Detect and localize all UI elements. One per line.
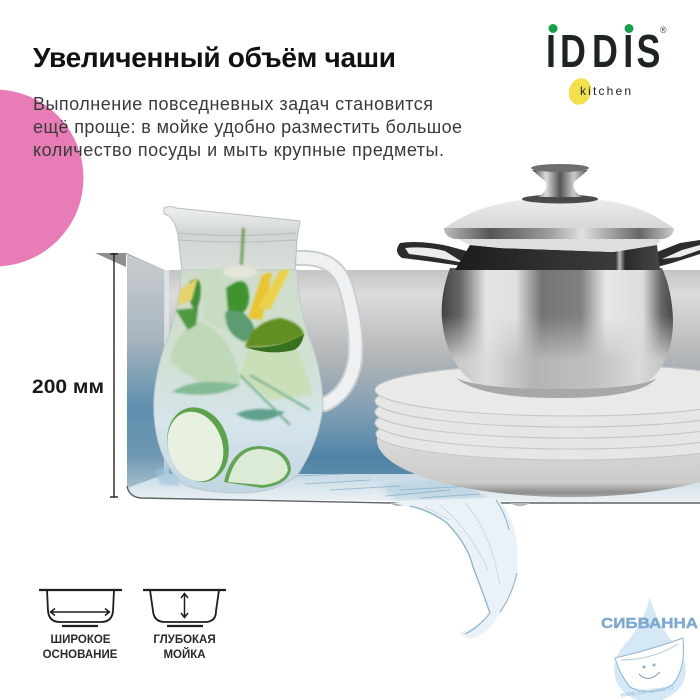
jug neck	[164, 206, 300, 272]
jug lemon wedges	[178, 270, 290, 320]
sink bottom edge	[127, 486, 700, 503]
pot lid rim	[444, 228, 674, 239]
steel pot	[397, 164, 700, 398]
pot lid dome	[445, 199, 673, 228]
icon: wide base sink	[39, 590, 122, 626]
description text	[33, 94, 462, 160]
watermark url: www.sibvanna.ru	[619, 685, 674, 699]
water stream	[393, 498, 518, 638]
icon: deep sink	[143, 590, 226, 626]
caption: wide base	[43, 634, 118, 661]
dimension line	[110, 253, 118, 497]
jug rim line	[178, 233, 296, 242]
pink circle	[0, 90, 84, 266]
bottom bowl plate	[377, 383, 700, 497]
caption: deep sink	[153, 634, 216, 661]
watermark drop	[614, 597, 686, 700]
sink floor	[127, 474, 700, 503]
logo: IDDIS kitchen: IDDIS	[546, 26, 660, 77]
sink left corner highlight	[164, 270, 169, 475]
jug handle highlight	[298, 258, 356, 404]
caption: deep sink: МОЙКА	[163, 648, 206, 661]
watermark bath	[615, 638, 684, 692]
logo: IDDIS kitchen: kitchen	[580, 84, 631, 98]
sink bowl	[95, 253, 700, 506]
description text: Выполнение повседневных задач становится	[33, 94, 433, 114]
sink drain feet	[390, 503, 530, 506]
logo: IDDIS kitchen	[546, 24, 667, 108]
caption: wide base: ОСНОВАНИЕ	[43, 649, 118, 661]
glass jug	[154, 206, 356, 493]
jug body	[154, 270, 323, 493]
sink flange	[95, 253, 165, 270]
watermark face	[639, 664, 660, 679]
title: Увеличенный объём чаши	[33, 42, 396, 73]
water on the floor	[155, 464, 490, 500]
pot right handle highlight	[662, 245, 700, 259]
pot left handle highlight	[405, 247, 464, 263]
jug big lime slice	[158, 399, 238, 490]
watermark: Sibvanna	[601, 597, 699, 700]
pot lid knob	[522, 164, 598, 204]
sink back wall	[165, 270, 700, 475]
description text: ещё проще: в мойке удобно разместить большое	[33, 117, 462, 137]
caption: deep sink: ГЛУБОКАЯ	[153, 634, 216, 646]
pot lid lower rim	[456, 238, 662, 252]
pot base ring	[456, 378, 657, 398]
jug leaves	[170, 228, 312, 425]
description text: количество посуды и мыть крупные предметы.	[33, 140, 444, 160]
watermark name: СИБВАННА	[601, 616, 699, 632]
jug lime half	[245, 318, 304, 352]
pot body	[442, 268, 673, 398]
jug handle	[298, 258, 356, 404]
stacked plates	[375, 364, 700, 460]
pot right handle	[657, 240, 700, 267]
pot left handle	[397, 242, 472, 268]
watermark bath rim	[621, 644, 678, 660]
sink left wall	[127, 254, 165, 490]
pot dark band	[455, 245, 660, 270]
logo: IDDIS kitchen: ®	[660, 25, 667, 35]
pot body upper shading	[442, 268, 673, 356]
caption: wide base: ШИРОКОЕ	[51, 634, 111, 646]
jug second lime slice	[224, 446, 291, 488]
depth label: 200 мм	[32, 377, 104, 398]
plate stack	[375, 364, 700, 497]
